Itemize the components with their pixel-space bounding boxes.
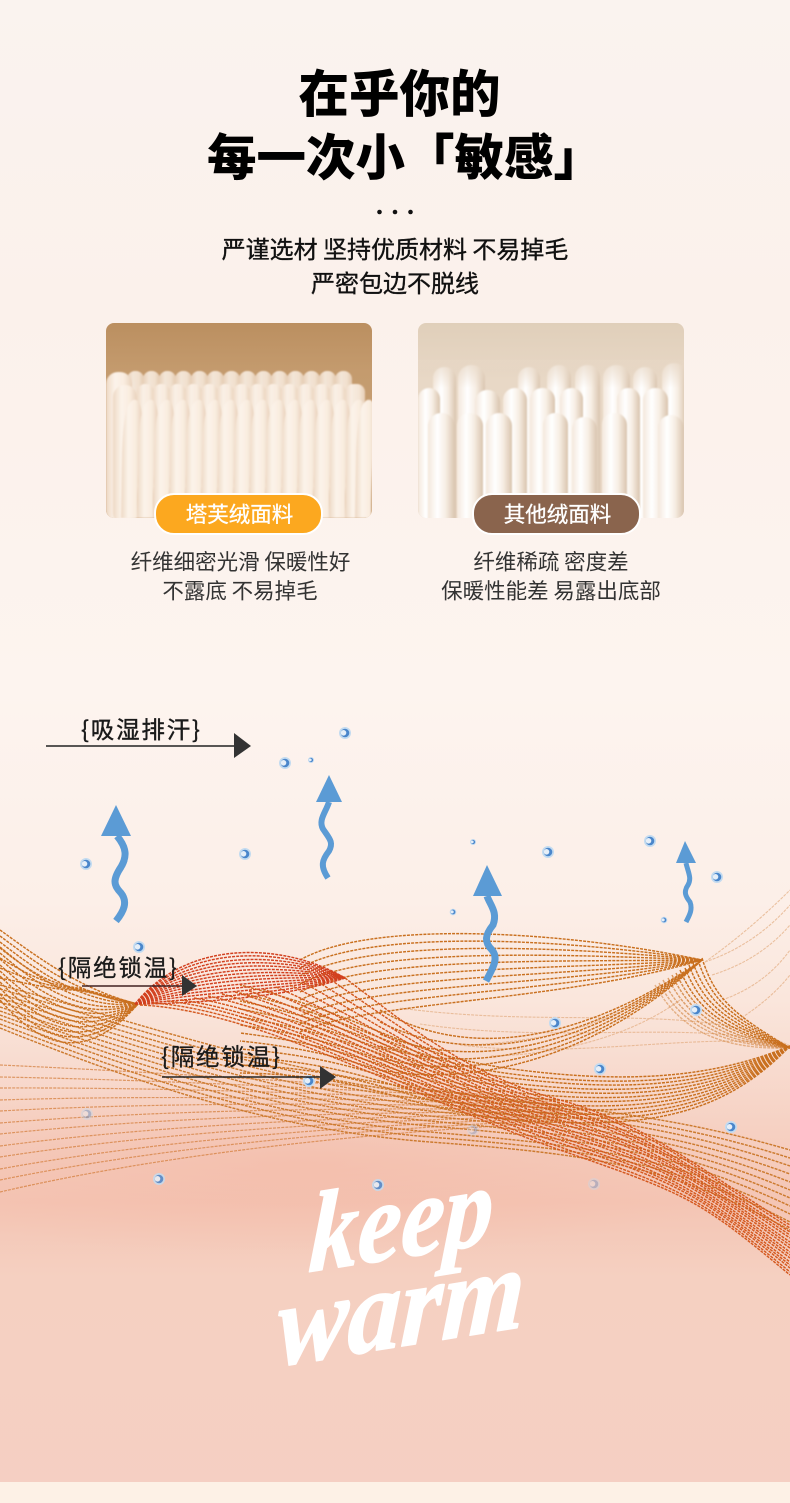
brush lettering: keep warm [275,1142,528,1392]
label pill: tarfu velvet: 塔芙绒面料 [186,498,293,529]
panel: other velvet fibres [418,323,686,537]
subtitle: 严密包边不脱线 [311,264,479,299]
callout: moisture wicking: {吸湿排汗} [81,711,200,745]
subtitle [222,230,568,299]
back fibres [433,363,686,527]
callout: moisture wicking [46,711,251,758]
arrow: blue wick arrow 2 [316,775,342,878]
middle fibres [418,388,668,530]
subtitle: 严谨选材 坚持优质材料 不易掉毛 [222,230,568,265]
panel: tarfu velvet fibres [106,323,376,525]
title [207,53,603,190]
front row of fibres [121,400,376,518]
top fade over back fibres [434,362,680,384]
ellipsis dots [377,210,413,214]
bottom strip [0,1482,790,1503]
front fibres [428,412,684,518]
chart: thick orange ribbon descending right [140,978,790,1275]
caption: tarfu velvet [131,546,350,606]
callout: heat insulation centre: {隔绝锁温} [161,1038,280,1072]
caption: other velvet: 保暖性能差 易露出底部 [441,574,661,606]
soft warm glow band [0,1075,780,1255]
brush lettering: keep warm: warm [275,1222,528,1392]
arrow: blue wick arrow 4 [676,841,696,922]
chart: long fibre band crossing the page [0,985,790,1230]
caption: other velvet: 纤维稀疏 密度差 [473,546,629,576]
chart: lower-left flat fibre lines [0,1065,560,1192]
chart: faint fan at the top right [400,890,790,1056]
brush lettering: keep warm: keep [307,1142,497,1297]
middle row of fibres [140,383,366,412]
title: 每一次小「敏感」 [207,119,603,190]
chart: left fan into the pinch [0,930,138,1043]
left edge fibres [106,372,137,525]
caption: tarfu velvet: 不露底 不易掉毛 [162,574,318,606]
title: 在乎你的 [298,53,500,127]
arrow: blue wick arrow 1 [101,805,131,921]
callout: heat insulation left [58,949,197,996]
caption: other velvet [441,546,661,606]
label pill: other velvet: 其他绒面料 [504,498,611,529]
back row of fibres [128,370,353,401]
chart: red hump [135,953,345,1004]
label pill: other velvet [473,494,640,534]
caption: tarfu velvet: 纤维细密光滑 保暖性好 [131,546,350,576]
chart: hook ribbon at the right [655,958,790,1048]
chart: top fibre arcs converging right [300,934,702,1075]
chart: band returning left from the right pinch [240,985,790,1123]
arrow: blue wick arrow 3 [473,865,502,981]
icons: moisture droplets [80,727,737,1191]
callout: heat insulation centre [161,1038,336,1089]
label pill: tarfu velvet [155,494,322,534]
callout: heat insulation left: {隔绝锁温} [58,949,177,983]
